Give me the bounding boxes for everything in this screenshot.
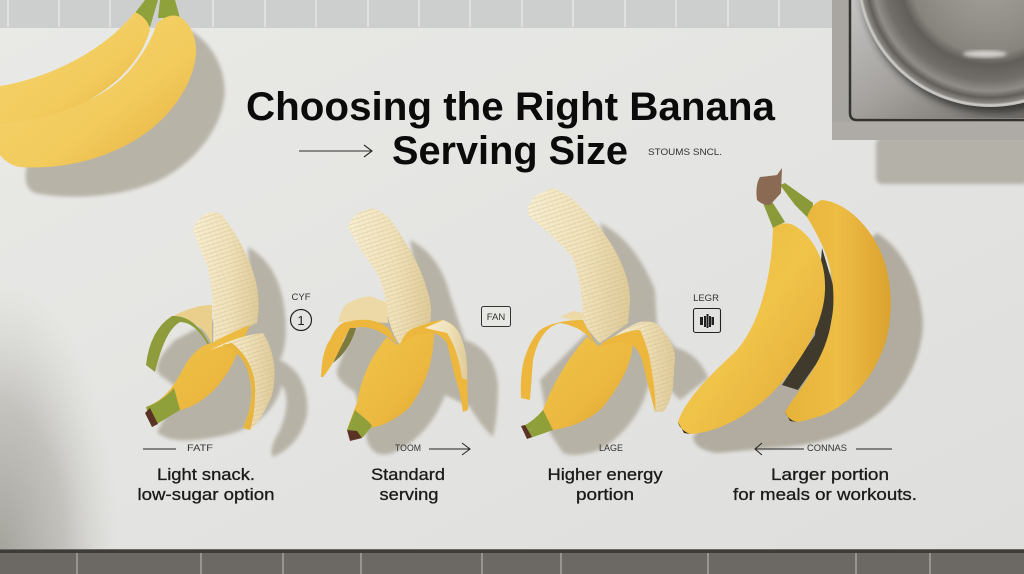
banana 1: light snack <box>145 212 307 457</box>
caption: light snack: low-sugar option <box>138 485 274 504</box>
banana 3: higher energy portion <box>521 188 708 455</box>
icon: circled one with label: CYF <box>292 292 311 303</box>
icon: LEGR label box <box>693 293 720 332</box>
caption: light snack <box>138 465 274 504</box>
top wall tiles <box>0 0 1024 29</box>
small labels above captions: LAGE <box>599 443 623 454</box>
small labels above captions <box>143 443 892 455</box>
small labels above captions: TOOM <box>395 443 421 454</box>
caption: standard serving: serving <box>380 485 438 504</box>
banana stem cap <box>756 168 782 205</box>
title: Serving Size <box>392 129 628 173</box>
icon: circled one with label: 1 <box>297 313 305 328</box>
steel sink with bowl <box>832 0 1024 184</box>
banana 4: larger portion pair <box>678 168 923 453</box>
caption: light snack: Light snack. <box>157 465 255 484</box>
bottom wall tiles <box>0 549 1024 574</box>
title: Choosing the Right Banana <box>246 85 776 129</box>
small label: top right: STOUMS SNCL. <box>648 147 722 158</box>
caption: larger portion: for meals or workouts. <box>733 485 917 504</box>
arrow beside title <box>299 145 372 157</box>
icon: FAN label box <box>482 306 510 326</box>
icon: LEGR label box: LEGR <box>693 293 719 304</box>
small labels above captions: CONNAS <box>807 443 847 454</box>
caption: higher energy portion: portion <box>576 485 634 504</box>
caption: standard serving: Standard <box>371 465 445 484</box>
caption: standard serving <box>371 465 445 504</box>
icon: circled one with label <box>290 292 312 330</box>
caption: larger portion <box>733 465 917 504</box>
caption: higher energy portion: Higher energy <box>548 465 663 484</box>
icon: steel bowl <box>857 0 1024 107</box>
caption: higher energy portion <box>548 465 663 504</box>
banana 2: standard serving <box>321 208 498 455</box>
title <box>246 85 776 173</box>
top-left banana bunch <box>0 0 225 197</box>
caption: larger portion: Larger portion <box>771 465 889 484</box>
icon: FAN label box: FAN <box>487 312 505 323</box>
small labels above captions: FATF <box>187 443 213 454</box>
